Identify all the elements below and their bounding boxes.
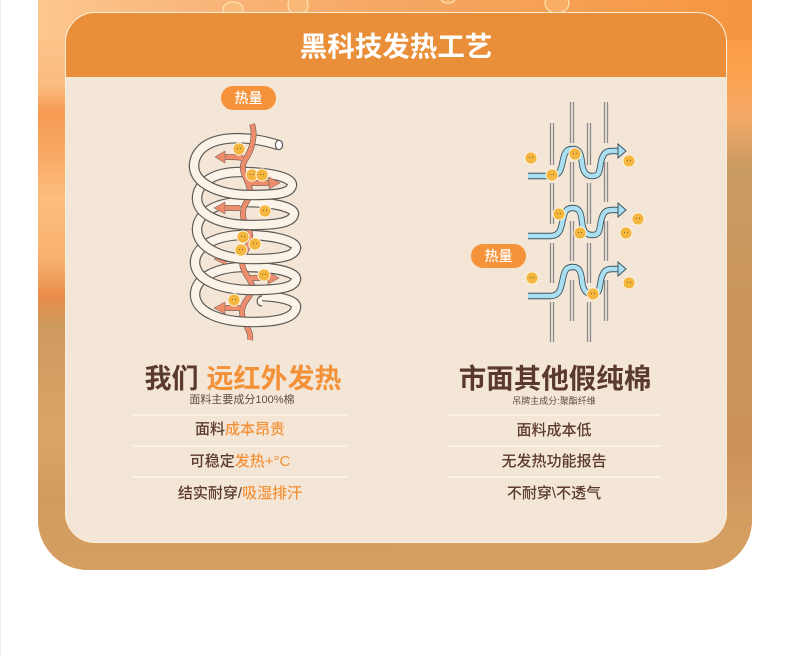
coil front strands bbox=[194, 166, 296, 322]
main card bbox=[65, 12, 727, 543]
airflow arrow row 2 bbox=[528, 203, 626, 236]
badge: 热量 left: 热量 bbox=[234, 90, 262, 106]
badge: 热量 left bbox=[221, 86, 276, 110]
left column subtitle: 面料主要成分100%棉 bbox=[189, 394, 295, 406]
row: 面料成本昂贵: 面料成本昂贵 bbox=[195, 421, 285, 438]
right column title: 市面其他假纯棉 bbox=[459, 363, 651, 394]
row: 结实耐穿: 结实耐穿/吸湿排汗 bbox=[178, 485, 302, 502]
badge: 热量 right bbox=[471, 244, 526, 268]
heat stem and arrows bbox=[214, 124, 280, 340]
right column comparison list bbox=[447, 414, 661, 502]
heat particles on coil bbox=[227, 142, 272, 307]
row: 无发热功能报告: 无发热功能报告 bbox=[501, 453, 606, 470]
fibre columns bbox=[550, 102, 608, 342]
coil inner curled end bbox=[257, 296, 262, 306]
right column subtitle: 吊牌主成分:聚酯纤维 bbox=[512, 396, 596, 406]
heat particles on fibres bbox=[524, 147, 645, 301]
heading: 黑科技发热工艺 bbox=[66, 13, 726, 77]
illustration: straight fibres with blue airflow bbox=[524, 102, 645, 342]
heading: 黑科技发热工艺: 黑科技发热工艺 bbox=[300, 31, 492, 62]
row: 可稳定发热: 可稳定发热+°C bbox=[190, 453, 290, 470]
airflow arrow row 3 bbox=[528, 262, 626, 296]
background panel bbox=[38, 0, 752, 570]
left column comparison list bbox=[133, 414, 347, 502]
row: 不耐穿不透气: 不耐穿\不透气 bbox=[507, 485, 601, 502]
airflow arrow row 1 bbox=[528, 144, 626, 176]
coil tube opening bbox=[275, 140, 283, 150]
decorative bubbles at top bbox=[222, 0, 570, 12]
coil back strands bbox=[194, 138, 296, 307]
left column title: 我们 远红外发热 bbox=[144, 364, 342, 394]
badge: 热量 right: 热量 bbox=[484, 248, 512, 264]
row: 面料成本低: 面料成本低 bbox=[516, 422, 592, 439]
